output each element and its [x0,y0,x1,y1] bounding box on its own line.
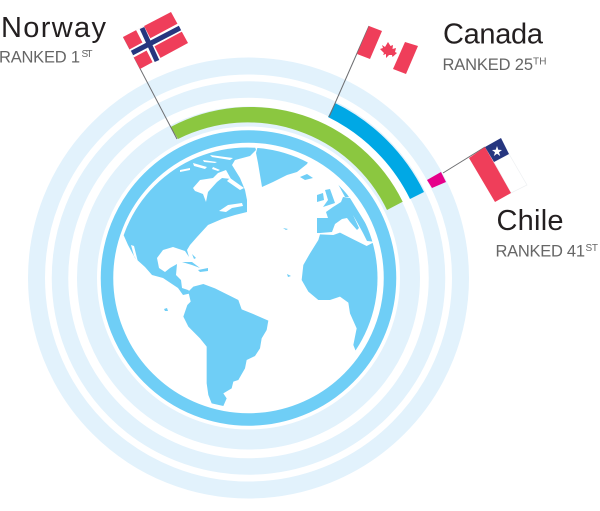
North America [124,148,256,295]
South America [183,284,268,406]
Cuba [182,262,200,268]
Cape Verde [287,274,291,277]
label: Canada: TH [533,56,546,68]
flag: Canada [329,26,418,117]
label: Norway: RANKED 1 [0,49,80,67]
label: Norway: ST [82,49,92,60]
concentric rings [36,66,460,490]
rank arc: Canada blue [328,103,424,199]
Greenland [256,148,308,187]
Iceland [300,174,313,180]
Ireland [317,193,324,202]
Hispaniola [198,268,208,272]
label: Canada: Canada [443,18,544,50]
label: Canada [442,18,546,74]
Canary islands [283,228,288,230]
Galapagos [164,308,168,311]
Europe [317,197,377,242]
Baja slit [131,245,138,262]
Scandinavia [338,184,349,197]
flag: Chile [443,138,527,202]
label: Chile: ST [586,243,598,254]
rank arc: Chile magenta [427,172,446,188]
arctic channels [180,155,233,172]
Great Britain [323,189,335,207]
Gulf of St Lawrence [219,203,243,212]
label: Canada: RANKED 25 [442,56,533,74]
Bahamas [192,254,196,259]
flag: Norway [123,12,188,139]
globe land masses [124,148,378,406]
rank arc: Norway green [171,107,403,210]
label: Chile: RANKED 41 [496,243,585,261]
Hudson Strait [227,178,244,190]
label: Norway [0,12,106,67]
label: Chile [496,205,598,261]
globe ring [107,136,390,420]
label: Norway: Norway [1,12,106,44]
Africa [302,232,378,350]
label: Chile: Chile [496,205,564,237]
Hudson Bay [193,170,231,202]
